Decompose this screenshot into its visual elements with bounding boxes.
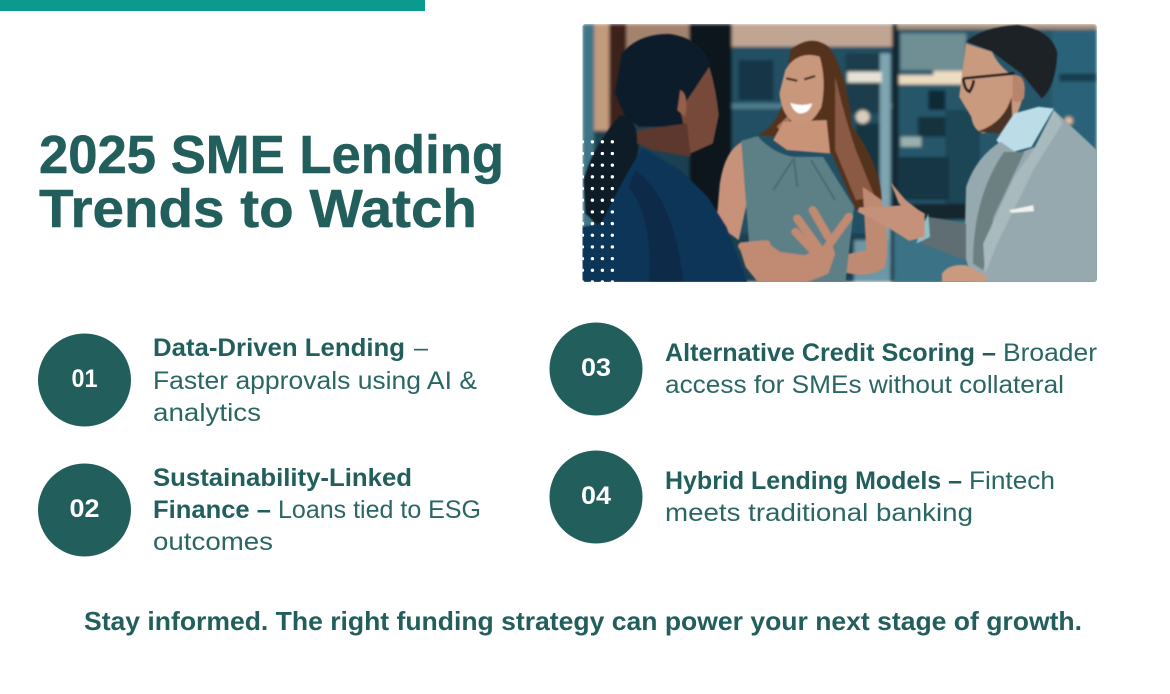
text: Alternative Credit Scoring: Alternative Credit Scoring – [665, 339, 996, 367]
title: Trends to Watch [39, 179, 477, 239]
text: Sustainability-Linked Finance [153, 464, 481, 556]
badge 02: 02 [70, 495, 100, 523]
trend 01 [38, 334, 477, 427]
badge 03 [550, 322, 642, 416]
text: Sustainability-Linked Finance: Finance – [153, 496, 271, 524]
glasses [963, 73, 1014, 92]
badge 01 [38, 334, 131, 426]
text: Sustainability-Linked Finance: outcomes [153, 528, 273, 556]
badge 01: 01 [72, 365, 98, 393]
trend 02 [38, 464, 481, 556]
badge 04: 04 [581, 482, 611, 510]
text: Alternative Credit Scoring: Broader [1003, 339, 1097, 367]
dot grid overlay [581, 140, 614, 284]
text: Hybrid Lending Models: meets traditional banking [665, 499, 973, 527]
text: Data-Driven Lending: Faster approvals using AI & [153, 367, 477, 395]
trend 03 [550, 322, 1097, 416]
text: Alternative Credit Scoring: access for SMEs without collateral [665, 371, 1064, 399]
middle woman [758, 41, 882, 210]
text: Hybrid Lending Models: Fintech [969, 467, 1055, 495]
left woman [615, 34, 709, 127]
top accent bar [0, 0, 425, 11]
badge 03: 03 [581, 354, 611, 382]
text: Data-Driven Lending: analytics [153, 399, 261, 427]
badge 02 [38, 464, 131, 556]
badge 04 [550, 450, 642, 544]
text: Data-Driven Lending: Data-Driven Lending [153, 334, 405, 362]
photo: three colleagues talking [581, 24, 1097, 284]
clasped hands [739, 244, 835, 282]
title: 2025 SME Lending [39, 125, 504, 185]
text: Sustainability-Linked Finance: Sustainability-Linked [153, 464, 412, 492]
closing statement: Stay informed. The right funding strategy can power your next stage of growth. [84, 606, 1082, 636]
text: Data-Driven Lending [153, 334, 477, 427]
text: Data-Driven Lending: – [414, 334, 428, 362]
title [39, 125, 504, 239]
text: Hybrid Lending Models [665, 467, 1055, 527]
text: Sustainability-Linked Finance: Loans tied to ESG [278, 496, 481, 524]
text: Hybrid Lending Models: Hybrid Lending Models – [665, 467, 962, 495]
trend 04 [550, 450, 1055, 544]
text: Alternative Credit Scoring [665, 339, 1097, 399]
right man [966, 25, 1057, 98]
